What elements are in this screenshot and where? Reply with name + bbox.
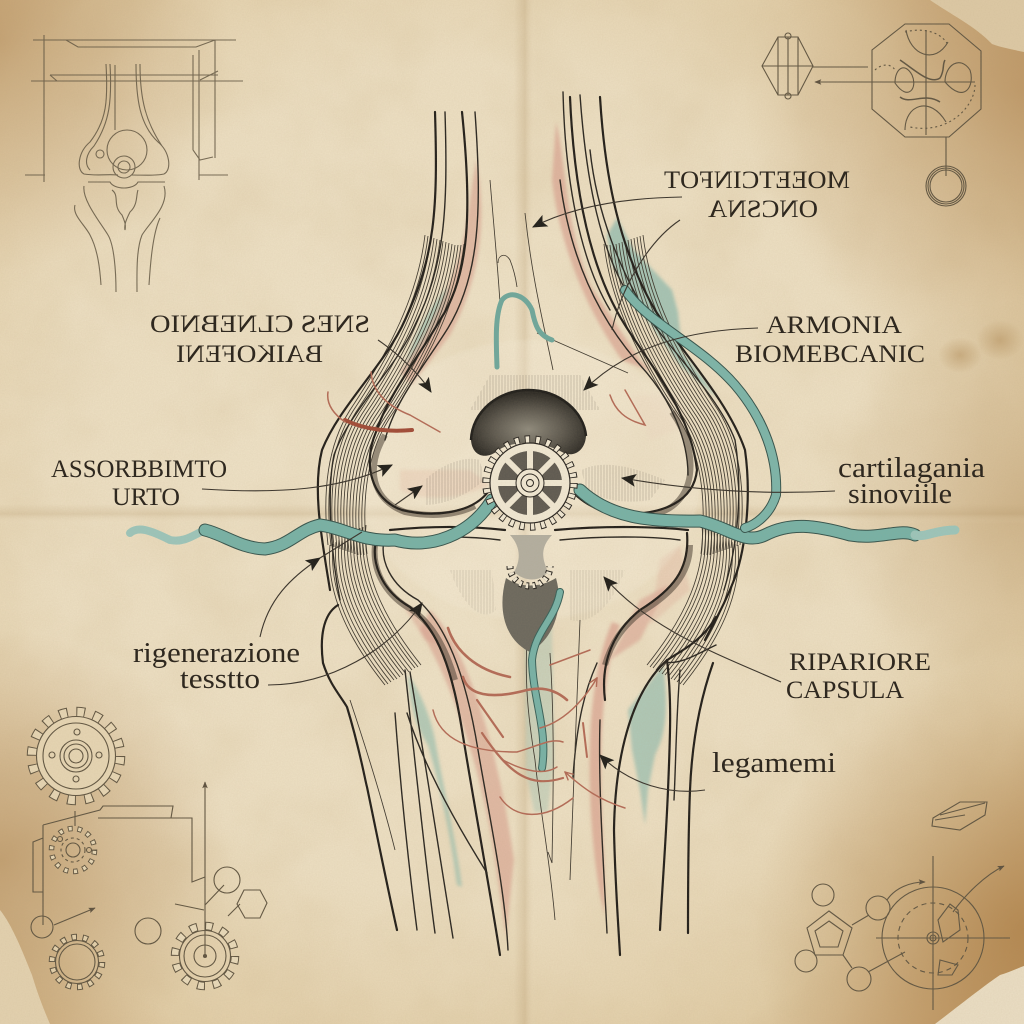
loop ribbon — [496, 295, 552, 367]
label: rigenerazione tessuto — [133, 637, 300, 695]
label: legamenti: legamemi — [712, 747, 836, 779]
label: mirrored top right: MOEETCINFOT — [664, 167, 850, 194]
label: armonia biomeccanica: BIOMEBCANIC — [735, 341, 925, 368]
sketch: gears and linkage — [31, 712, 267, 987]
label: mirrored top right — [664, 167, 850, 223]
knee illustration: bones and muscle bands — [318, 92, 748, 955]
dark shaded bands along condyles and tibia plateau — [374, 412, 691, 680]
sketch: small knee with drafting frame — [25, 35, 243, 292]
lower right gear — [175, 926, 235, 986]
femur and condyle outlines — [318, 112, 436, 590]
label: rigenerazione tessuto: tesstto — [180, 663, 260, 695]
label: assorbimento urto — [51, 456, 227, 511]
large gear — [32, 712, 120, 800]
label: mirrored left: SNES CLNEBNIO — [150, 311, 370, 338]
sketch: octagon mechanism — [762, 24, 981, 206]
label: assorbimento urto: URTO — [112, 484, 180, 511]
small lower gear — [510, 566, 550, 586]
horizontal ribbon — [130, 529, 205, 541]
label: riparazione capsula: RIPARIORE — [789, 649, 931, 676]
central gear mechanism — [486, 440, 574, 586]
condyle stubble hatching — [425, 459, 484, 505]
teal ligament ribbons — [130, 290, 955, 768]
watercolour washes — [400, 122, 720, 937]
central dark notch — [471, 390, 586, 652]
label: mirrored left — [150, 311, 370, 368]
lower leg left lines — [322, 605, 397, 930]
red vessels — [328, 372, 645, 814]
label: armonia biomeccanica — [735, 312, 925, 368]
torn corner: bottom left — [0, 910, 50, 1024]
label: mirrored top right: ONCSNA — [708, 196, 818, 223]
label: riparazione capsula: CAPSULA — [786, 677, 904, 704]
small gear — [52, 828, 94, 872]
label: assorbimento urto: ASSORBBIMTO — [51, 456, 227, 483]
label: riparazione capsula — [786, 649, 931, 704]
label: cartilagine sinoviale: sinoviile — [848, 478, 952, 510]
lower left gear — [52, 937, 102, 987]
label: cartilagine sinoviale — [838, 452, 985, 510]
label: rigenerazione tessuto: rigenerazione — [133, 637, 300, 669]
torn corner: top right — [930, 0, 1024, 52]
right hatching — [604, 235, 742, 685]
leader lines and arrows — [202, 197, 835, 791]
torn corner: bottom right — [935, 966, 1024, 1024]
label: armonia biomeccanica: ARMONIA — [766, 312, 902, 339]
sketch: pentagon and dial — [795, 802, 1010, 1010]
label: mirrored left: BAIKOFENI — [176, 341, 323, 368]
lower central ribbon — [532, 592, 560, 768]
right shoulder ribbon — [625, 290, 776, 528]
label: cartilagine sinoviale: cartilagania — [838, 452, 985, 484]
central thin lines — [490, 180, 553, 370]
left hatching — [326, 235, 464, 685]
tibia outlines — [375, 537, 500, 955]
